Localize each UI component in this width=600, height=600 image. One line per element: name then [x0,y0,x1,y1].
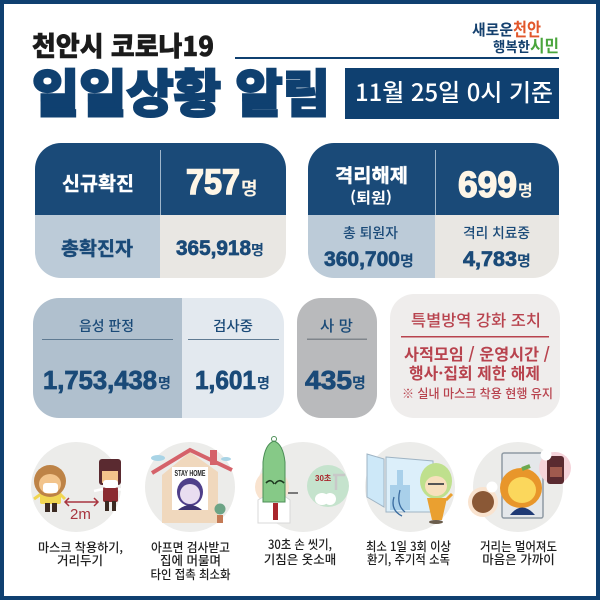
panel: 특별방역 강화 조치: ※ 실내 마스크 착용 현행 유지 [402,383,553,402]
caption: 마스크 착용하기: 마스크 착용하기, [38,537,123,556]
panel: 사망: 435 [305,365,352,395]
icon: hand washing cucumber: 30초 [315,474,332,483]
icon: mask and 2m distance [31,442,129,532]
panel: 음성 판정 / 검사중: 명 [257,373,270,393]
panel: 격리해제: (퇴원) [350,187,392,208]
caption: 최소 1일 3회 이상 [366,536,451,568]
title: 일일상황 알림: 일일상황 알림 [32,53,330,127]
panel: 신규확진: 명 [251,240,264,260]
panel: 사망: 사 망 [320,315,353,336]
logo: 새로운 천안 행복한 시민: 행복한 [493,37,530,57]
panel: 특별방역 강화 조치: 특별방역 강화 조치 [411,307,541,331]
panel: 사망: 명 [352,372,366,393]
logo: 새로운 천안 행복한 시민: 천안 [513,16,541,42]
caption: 최소 1일 3회 이상: 환기, 주기적 소독 [367,549,450,568]
panel: 특별방역 강화 조치 [390,294,560,418]
panel: 신규확진: 신규확진 [62,169,134,196]
panel: 음성 판정 / 검사중 [33,298,284,418]
caption: 아프면 검사받고: 아프면 검사받고 [151,537,230,556]
caption: 최소 1일 3회 이상: 최소 1일 3회 이상 [366,536,451,555]
panel: 격리해제: 명 [400,250,414,271]
panel: 격리해제: 699 [458,164,517,205]
panel: 음성 판정 / 검사중: 1,601 [195,365,256,395]
panel: 격리해제: 명 [518,177,533,201]
caption: 거리는 멀어져도: 거리는 멀어져도 [480,536,557,555]
icon: hand washing cucumber [255,436,349,532]
caption: 거리는 멀어져도: 마음은 가까이 [482,549,555,568]
caption: 아프면 검사받고: 집에 머물며 [160,550,221,569]
icon: ventilation window [365,442,455,532]
caption: 30초 손 씻기 [264,534,336,568]
panel: 사망 [297,298,377,418]
icon: mask and 2m distance: 2m [70,506,91,523]
panel: 신규확진 [35,143,286,278]
icon: stay home [145,442,235,532]
date badge [345,68,559,119]
caption: 마스크 착용하기: 거리두기 [57,550,103,569]
caption: 30초 손 씻기: 30초 손 씻기, [268,534,332,553]
icon: video call [468,442,571,532]
panel: 음성 판정 / 검사중: 1,753,438 [43,365,157,395]
panel: 격리해제: 격리 치료중 [463,223,530,243]
panel: 음성 판정 / 검사중: 명 [158,373,171,393]
panel: 격리해제: 명 [517,250,531,271]
logo: 새로운 천안 행복한 시민 [472,16,559,57]
panel: 격리해제: 4,783 [463,248,517,271]
icon: stay home: STAY HOME [174,469,206,478]
panel: 격리해제: 360,700 [324,248,400,271]
panel: 음성 판정 / 검사중: 검사중 [213,316,253,336]
panel: 격리해제: 총 퇴원자 [343,223,398,243]
panel: 신규확진: 총확진자 [61,234,134,261]
panel: 격리해제 [308,143,559,278]
caption: 30초 손 씻기: 기침은 옷소매 [264,549,336,568]
panel: 음성 판정 / 검사중: 음성 판정 [79,316,134,336]
panel: 신규확진: 365,918 [176,237,251,260]
date badge: 11월 25일 0시 기준 [355,73,553,108]
panel: 신규확진: 명 [241,175,258,201]
logo: 새로운 천안 행복한 시민: 시민 [530,32,559,57]
caption: 거리는 멀어져도 [480,536,557,568]
caption: 마스크 착용하기 [38,537,123,569]
title: 천안시 코로나19: 천안시 코로나19 [32,25,214,64]
caption: 아프면 검사받고 [150,537,231,583]
panel: 특별방역 강화 조치: 행사·집회 제한 해제 [409,360,540,384]
panel: 신규확진: 757 [186,163,240,202]
logo: 새로운 천안 행복한 시민: 새로운 [472,19,513,40]
panel: 특별방역 강화 조치: 사적모임 / 운영시간 / [404,341,550,365]
header rule [235,57,559,59]
caption: 아프면 검사받고: 타인 접촉 최소화 [150,564,231,583]
panel: 격리해제: 격리해제 [335,161,408,188]
